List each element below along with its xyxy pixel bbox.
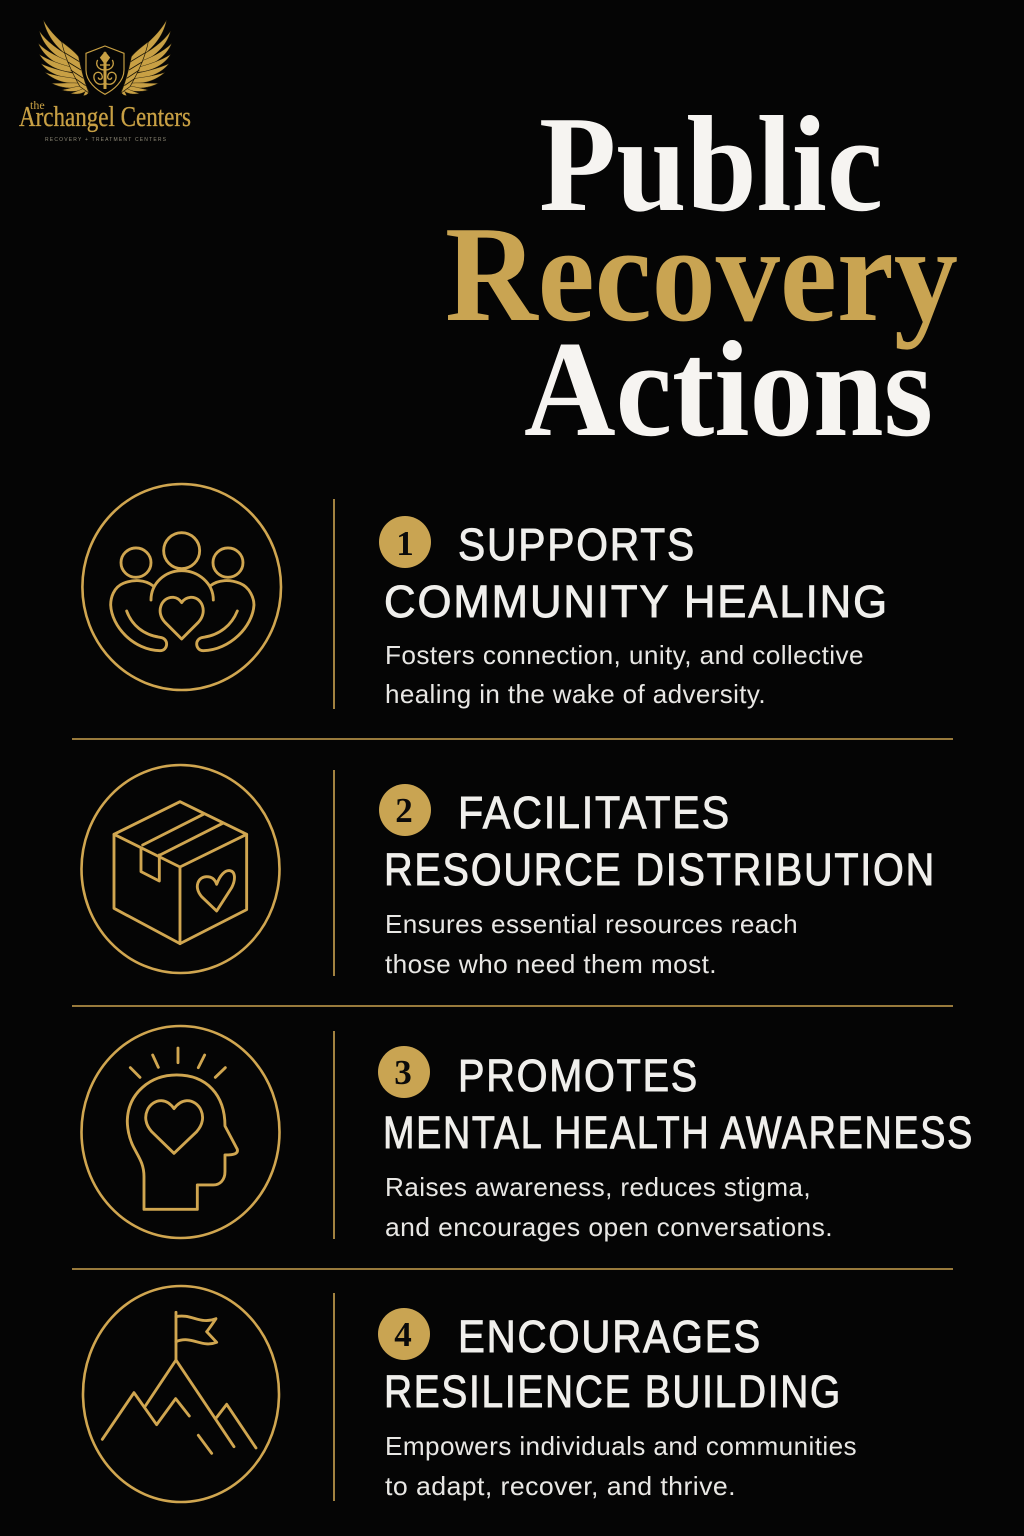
heading [384,787,936,895]
number badge 1: 1 [396,524,414,563]
divider [333,1031,335,1239]
title: Public [539,88,883,240]
heading: RESOURCE DISTRIBUTION [384,844,936,895]
divider [333,770,335,976]
description [385,1172,833,1242]
description [385,909,798,979]
divider [333,1293,335,1501]
description: Raises awareness, reduces stigma, [385,1172,811,1202]
number badge 4: 4 [394,1315,412,1354]
description: Empowers individuals and communities [385,1431,857,1461]
panel: supports community healing [82,484,889,709]
divider [333,499,335,709]
number badge 2: 2 [395,791,413,830]
icon: head with heart [82,1026,280,1238]
number badge 2 [379,784,431,836]
description: those who need them most. [385,949,717,979]
heading [384,519,889,627]
description: healing in the wake of adversity. [385,679,766,709]
panel: promotes mental health awareness [82,1026,974,1242]
logo wordmark: the [30,98,45,112]
number badge 4 [378,1308,430,1360]
description: to adapt, recover, and thrive. [385,1471,736,1501]
logo: The Archangel Centers: RECOVERY + TREATMENT CENTERS [45,137,167,143]
description: Fosters connection, unity, and collective [385,640,864,670]
right wing [121,20,172,96]
panel: facilitates resource distribution [82,765,936,979]
icon: mountain with flag [83,1286,279,1502]
logo: The Archangel Centers [19,20,191,143]
fleur ornament [94,52,116,89]
heading: SUPPORTS [458,519,696,570]
description [385,1431,857,1501]
title [445,88,958,465]
heading: ENCOURAGES [458,1311,762,1362]
shield [86,46,124,94]
number badge 1 [379,516,431,568]
title: Recovery [445,198,958,350]
number badge 3: 3 [394,1053,412,1092]
icon: winged shield [38,20,172,96]
icon: box with heart [82,765,280,973]
logo: The Archangel Centers: Archangel Centers [19,102,191,133]
icon: people and heart [82,484,281,690]
description [385,640,864,709]
heading [384,1311,842,1417]
title: Actions [524,313,933,465]
left wing [38,20,89,96]
description: Ensures essential resources reach [385,909,798,939]
heading [383,1050,974,1158]
heading: COMMUNITY HEALING [384,576,889,627]
heading: PROMOTES [458,1050,699,1101]
panel: encourages resilience building [83,1286,857,1502]
number badge 3 [378,1046,430,1098]
description: and encourages open conversations. [385,1212,833,1242]
heading: RESILIENCE BUILDING [384,1366,842,1417]
heading: FACILITATES [458,787,731,838]
